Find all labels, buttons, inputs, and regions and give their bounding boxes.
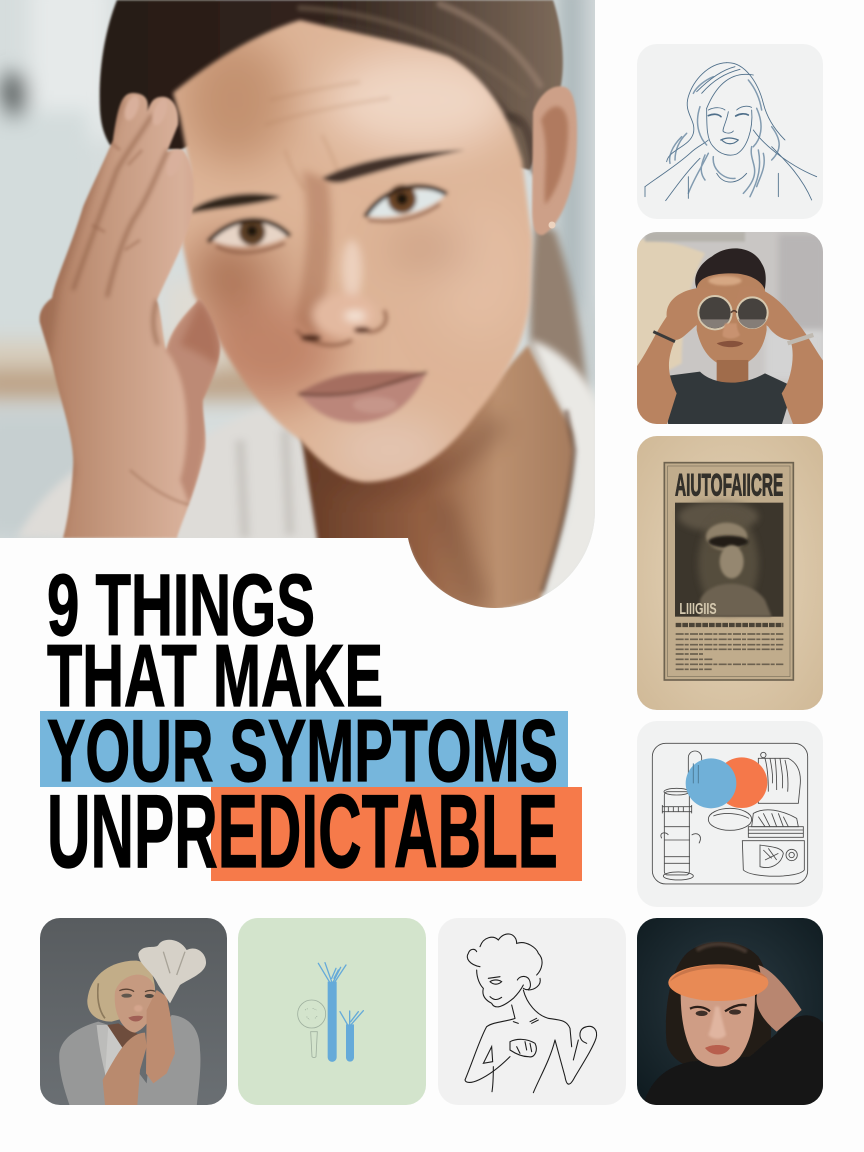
card: vintage poster [637, 436, 823, 710]
card: pencil sketch of woman [637, 44, 823, 219]
hair [87, 961, 155, 1022]
card: woman in grey sweater with mitt [40, 918, 227, 1107]
eyebrows [190, 193, 281, 213]
poster small print [676, 625, 783, 669]
hair [666, 942, 771, 1067]
sweater [59, 1015, 200, 1107]
thumb [166, 298, 220, 505]
title line 3: YOUR SYMPTOMS [47, 701, 558, 800]
arms [146, 990, 175, 1083]
card: man looking through round glasses [632, 232, 827, 425]
blue circle [686, 758, 736, 808]
eye: left [208, 218, 290, 252]
lips [298, 371, 427, 423]
title [40, 557, 582, 890]
hero photo: woman holding her head [0, 0, 602, 612]
tall blue bar [328, 982, 337, 1062]
card: green with blue bars [238, 918, 426, 1105]
earring [548, 222, 556, 228]
forehead wrinkles [307, 80, 388, 158]
face [115, 975, 155, 1033]
blurred room background [0, 0, 602, 540]
title line 1: 9 THINGS [47, 557, 315, 654]
knuckle and wrist creases [92, 142, 190, 505]
finger separators [73, 115, 168, 345]
title line 2: THAT MAKE [47, 626, 383, 725]
nose shading [295, 170, 377, 340]
face [681, 993, 755, 1067]
eye: right [365, 184, 447, 221]
poster picture: LIIIGIIS [679, 601, 717, 618]
magnifier [298, 1000, 326, 1058]
neck [108, 1023, 138, 1048]
highlight: blue bar [40, 711, 568, 787]
short blue bar [346, 1024, 354, 1062]
shirt [17, 340, 600, 600]
shaded edge of hand [40, 99, 126, 488]
card: line drawing with overlapping circles [637, 721, 823, 907]
ear [532, 86, 577, 235]
mitt [138, 940, 206, 1003]
orange disc [668, 964, 768, 1001]
highlight: orange bar [211, 787, 582, 881]
jacket [643, 1015, 823, 1105]
poster frame [664, 463, 793, 680]
fingernails [124, 96, 164, 124]
hair [100, 0, 588, 445]
orange circle [726, 757, 768, 808]
card: woman with orange disc on head [637, 918, 823, 1105]
face [170, 15, 540, 490]
poster picture [675, 502, 783, 618]
card: line drawing of figure [438, 918, 626, 1105]
hand [30, 90, 230, 540]
hand [757, 965, 802, 1032]
neck [300, 345, 574, 612]
